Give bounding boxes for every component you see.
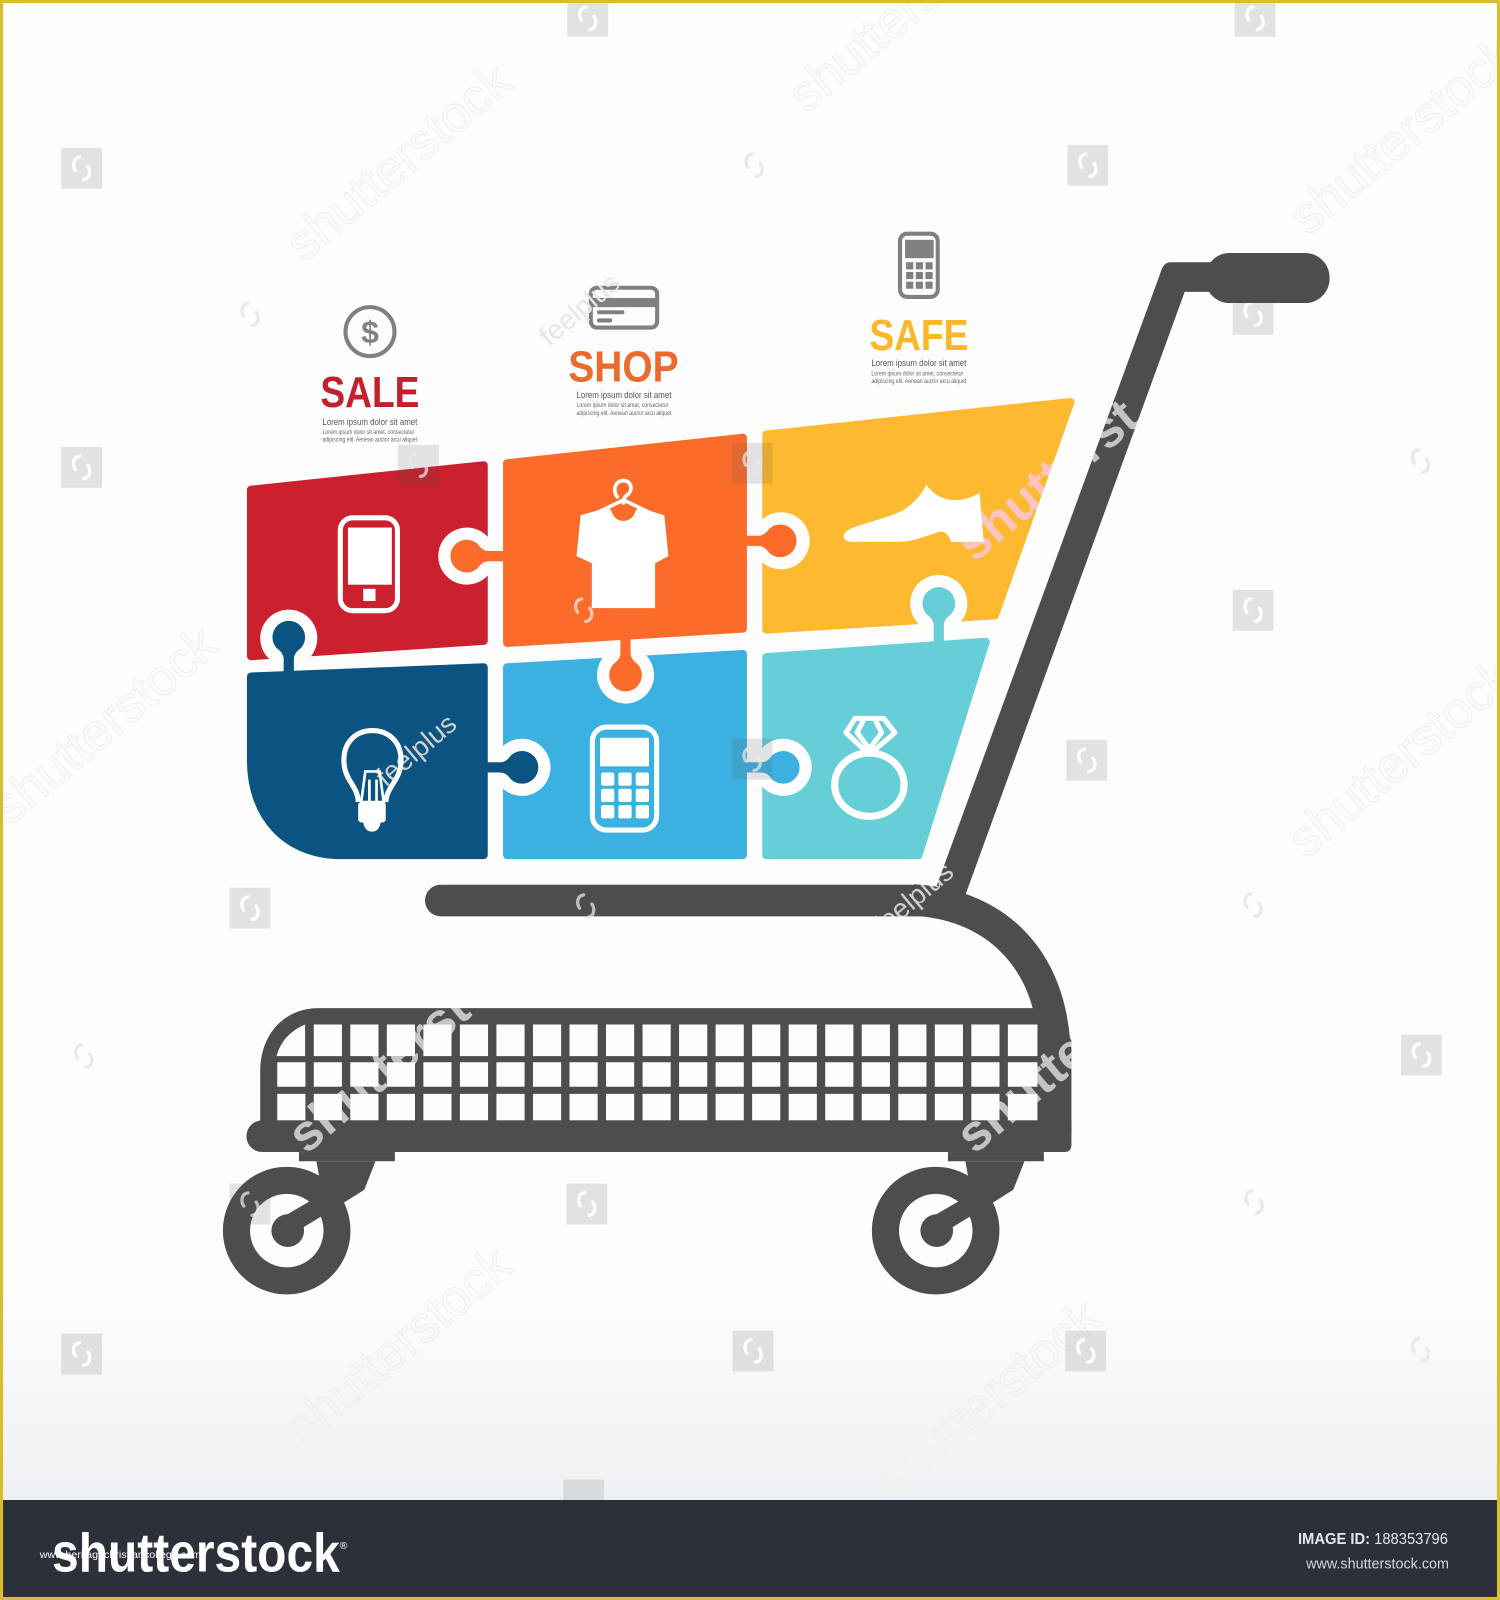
cart frame xyxy=(223,253,1330,1294)
watermark: text over artwork xyxy=(277,267,1149,1164)
panel: red piece xyxy=(251,465,484,656)
watermark: text over artwork: feelplus xyxy=(867,856,959,940)
icon: light bulb xyxy=(344,731,401,832)
footer site credit: www.heritagechristiancollege.com xyxy=(39,1550,201,1561)
text block: safe description: Lorem ipsum dolor sit amet, consectetur xyxy=(871,371,964,378)
icon: dollar coin: $ xyxy=(361,314,379,350)
handle grip xyxy=(1205,253,1330,303)
text block: shop description: adipiscing elit. Aenean auctor arcu aliquet xyxy=(577,410,672,417)
text block: shop description: Lorem ipsum dolor sit amet xyxy=(577,390,672,400)
knob: teal into yellow xyxy=(922,587,955,644)
heading: safe: SAFE xyxy=(869,311,968,360)
watermark: text over artwork: shutterst xyxy=(277,980,480,1164)
column: sale xyxy=(320,307,419,443)
text block: sale description: adipiscing elit. Aenean auctor arcu aliquet xyxy=(322,436,417,443)
basket base bar xyxy=(246,1120,1071,1152)
icon: calculator xyxy=(592,727,657,830)
heading: shop: SHOP xyxy=(568,343,679,392)
watermark: faint stock text: shutterstock xyxy=(275,51,522,272)
footer logo: shutterstock xyxy=(52,1521,340,1583)
watermark: faint stock text: shutterstock xyxy=(275,1235,522,1455)
text block: shop description xyxy=(577,390,672,417)
watermark: text over artwork: feelplus xyxy=(533,267,626,352)
column: safe xyxy=(869,234,968,385)
footer image id: IMAGE ID: 188353796 xyxy=(1298,1531,1448,1548)
text block: sale description: Lorem ipsum dolor sit amet, consectetur xyxy=(322,429,415,436)
footer url: www.shutterstock.com xyxy=(1305,1556,1449,1572)
panel: light blue piece xyxy=(507,654,743,855)
text block: sale description xyxy=(322,417,418,443)
footer registered mark: ® xyxy=(340,1541,348,1552)
puzzle knob halos xyxy=(260,512,967,796)
text block: sale description: Lorem ipsum dolor sit amet xyxy=(322,417,418,427)
column: shop xyxy=(568,288,679,417)
cart shelf bar xyxy=(425,885,923,916)
basket mesh xyxy=(260,1008,1071,1133)
watermark: text over artwork: shutterst xyxy=(945,980,1149,1164)
panel: yellow piece xyxy=(766,402,1070,630)
text block: shop description: Lorem ipsum dolor sit amet, consectetur xyxy=(577,402,669,409)
text block: safe description xyxy=(871,358,967,385)
puzzle: six cart pieces xyxy=(251,402,1070,855)
curved support xyxy=(913,900,1055,1135)
right wheel and bracket xyxy=(872,1152,1044,1294)
panel: dark blue piece xyxy=(251,667,484,855)
icon: shoe xyxy=(844,485,984,542)
text block: safe description: adipiscing elit. Aenean auctor arcu aliquet xyxy=(871,378,966,385)
icon: smartphone xyxy=(340,518,397,611)
watermark: text over artwork: feelplus xyxy=(370,708,462,792)
panel: teal piece xyxy=(766,642,986,855)
knob: orange into light blue xyxy=(609,635,642,691)
handle rod xyxy=(937,262,1219,898)
knob: orange into yellow xyxy=(740,524,797,557)
footer bar xyxy=(0,1500,1500,1600)
watermark: tiles over puzzle xyxy=(230,443,772,1224)
icon: mobile calculator xyxy=(900,234,938,297)
watermark: faint stock text: shutterstock xyxy=(863,1288,1111,1508)
knob: orange into red xyxy=(450,540,507,572)
icon: t-shirt on hanger xyxy=(577,481,668,608)
knob: light blue into teal xyxy=(743,751,800,784)
heading: sale: SALE xyxy=(320,368,419,417)
knob: dark blue into light blue xyxy=(482,751,538,784)
watermark: text over artwork: shutterst xyxy=(945,388,1149,572)
text block: safe description: Lorem ipsum dolor sit amet xyxy=(871,358,967,368)
knob: dark blue into red xyxy=(272,621,305,678)
left wheel and bracket xyxy=(223,1152,395,1294)
icon: credit card xyxy=(591,288,657,328)
panel: orange piece xyxy=(507,438,743,643)
icon: diamond ring xyxy=(835,718,904,816)
